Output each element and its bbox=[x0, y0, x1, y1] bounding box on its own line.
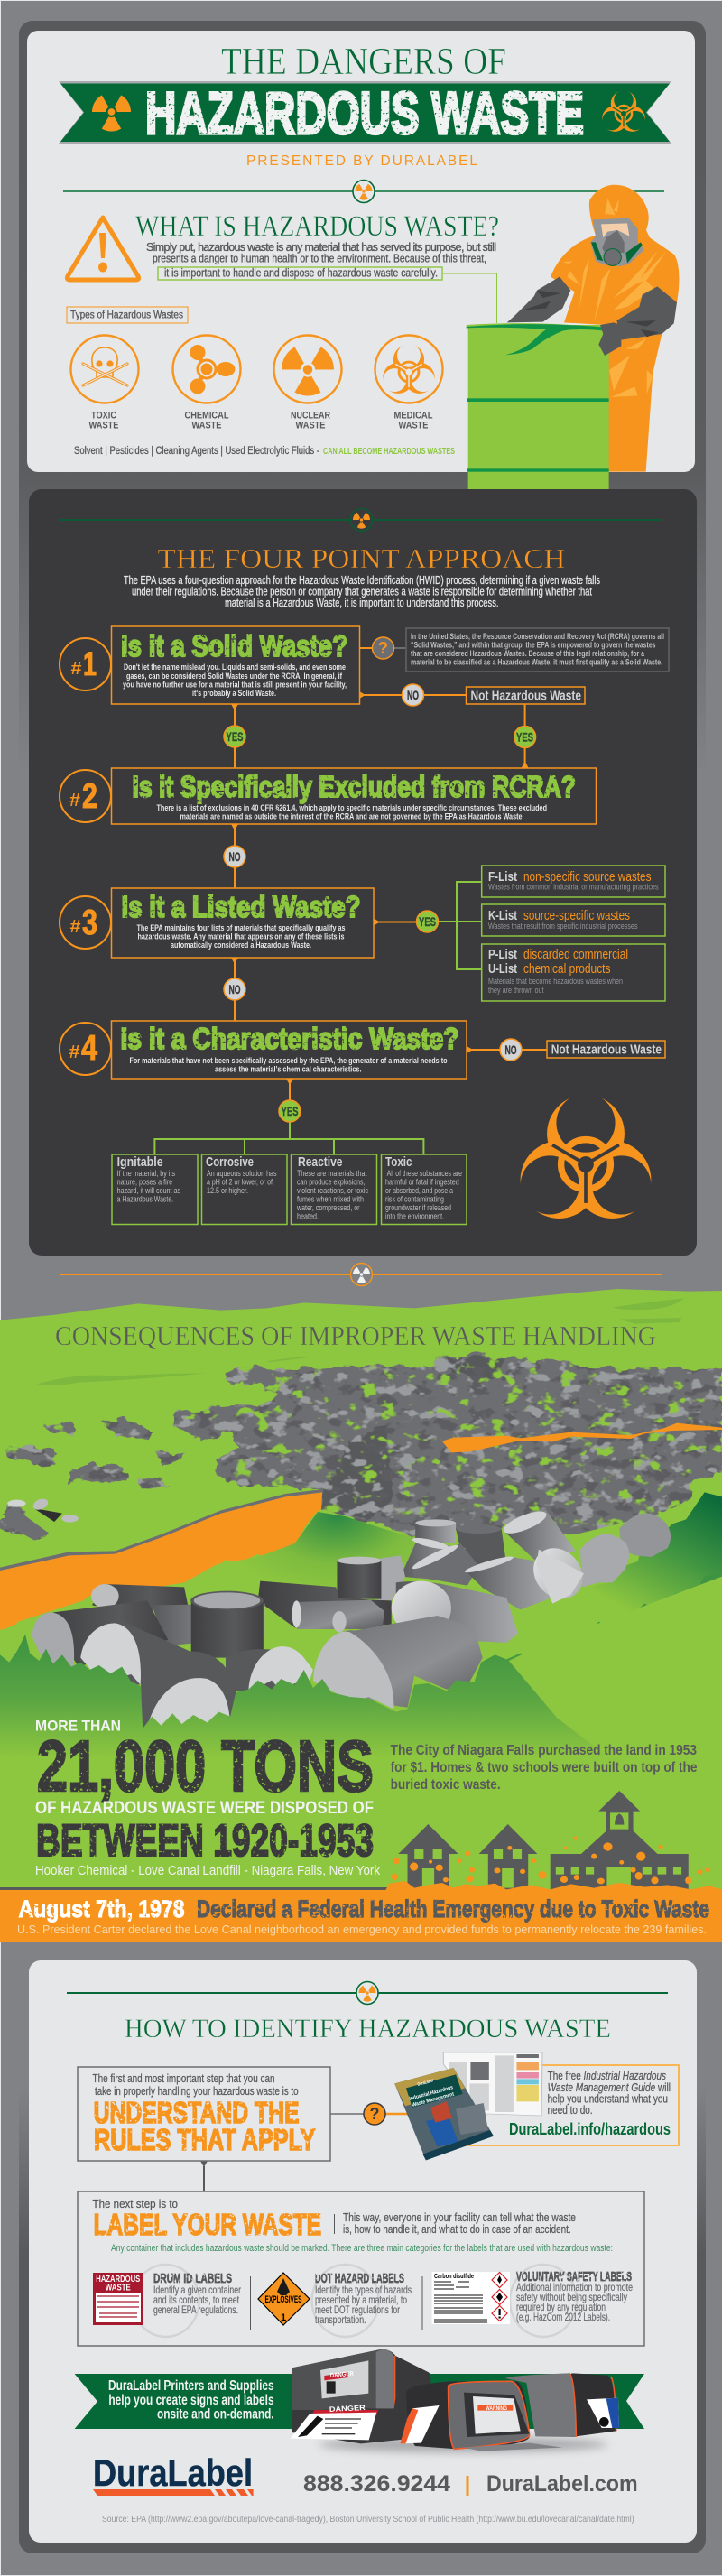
guide open pages bbox=[443, 2052, 542, 2116]
guide url: DuraLabel.info/hazardous bbox=[509, 2119, 671, 2138]
logo: DuraLabel: DuraLabel bbox=[93, 2451, 253, 2494]
voluntary safety description bbox=[516, 2269, 633, 2323]
list box: F-list: Wastes from common industrial or manufacturing practices bbox=[488, 883, 659, 892]
contact: phone and website bbox=[303, 2471, 638, 2497]
label: toxic waste: TOXIC bbox=[91, 410, 116, 421]
step 4 question: Is it a Characteristic Waste? bbox=[121, 1022, 458, 1055]
heading: consequences: CONSEQUENCES OF IMPROPER WASTE HANDLING bbox=[55, 1320, 656, 1351]
illustration: green hills, landfill town and barrels bbox=[0, 1289, 722, 1889]
stat: of hazardous waste: OF HAZARDOUS WASTE WERE DISPOSED OF bbox=[35, 1798, 374, 1818]
gray printer bbox=[505, 2373, 619, 2437]
question node: ? bbox=[370, 2105, 379, 2123]
guide callout: need to do. bbox=[548, 2103, 593, 2117]
node: no: NO bbox=[229, 849, 241, 864]
date: August 7th, 1978 bbox=[18, 1895, 184, 1923]
characteristic: ignitable bbox=[112, 1154, 198, 1224]
definition text: Simply put, hazardous waste is any material that has served its purpose, but still bbox=[146, 241, 496, 254]
step 4 box bbox=[112, 1021, 467, 1079]
label: chemical waste: WASTE bbox=[191, 421, 222, 431]
step 2 description bbox=[157, 803, 547, 821]
sample: DOT hazard diamond bbox=[258, 2273, 310, 2325]
characteristic: toxic: harmful or fatal if ingested bbox=[385, 1177, 459, 1188]
sample: drum ID label bbox=[93, 2273, 143, 2325]
green hill bbox=[0, 1289, 722, 1889]
drum id description: DRUM ID LABELS bbox=[153, 2271, 232, 2286]
step: label your waste: is, how to handle it, and what to do in case of an accident. bbox=[343, 2222, 571, 2236]
characteristic: reactive: These are materials that bbox=[297, 1169, 367, 1179]
printer screen labels bbox=[329, 2371, 507, 2414]
stat: more than: MORE THAN bbox=[35, 1719, 121, 1735]
label: medical waste: MEDICAL bbox=[393, 410, 433, 421]
list box: P-list and U-list: they are thrown out bbox=[488, 986, 544, 995]
small printer bbox=[400, 2381, 562, 2451]
section divider bbox=[67, 1982, 668, 2004]
panel: four point approach bbox=[29, 489, 697, 1256]
characteristic: ignitable: Ignitable bbox=[117, 1154, 163, 1170]
step 1 description: Don't let the name mislead you. Liquids and semi-solids, and even some bbox=[124, 663, 346, 672]
examples line: CAN ALL BECOME HAZARDOUS WASTES bbox=[323, 446, 455, 457]
node: yes: YES bbox=[419, 914, 436, 929]
ribbon: printers and supplies: help you create signs and labels bbox=[108, 2393, 274, 2408]
gray ground line bbox=[0, 1887, 388, 1890]
dot hazard description: meet DOT regulations for bbox=[315, 2303, 400, 2316]
respirator mask bbox=[590, 218, 644, 266]
definition text bbox=[146, 241, 496, 265]
characteristic: reactive: can produce explosions, bbox=[297, 1177, 365, 1188]
title line: the dangers of: THE DANGERS OF bbox=[221, 42, 506, 83]
arrowheads bbox=[231, 691, 529, 1085]
characteristic: reactive: water, compressed, or bbox=[296, 1203, 359, 1213]
callout: handle carefully bbox=[158, 267, 496, 323]
icon: nuclear waste bbox=[274, 336, 341, 403]
category dividers bbox=[251, 2276, 422, 2330]
question mark node bbox=[372, 637, 393, 659]
characteristic: corrosive: Corrosive bbox=[206, 1154, 254, 1170]
callout: handle carefully: it is important to handle and dispose of hazardous waste carefully. bbox=[164, 267, 438, 280]
niagara falls text: buried toxic waste. bbox=[391, 1777, 501, 1793]
barrels: center rows bbox=[258, 1555, 518, 1643]
icon: chemical waste bbox=[173, 336, 240, 403]
list box: K-list bbox=[482, 904, 665, 936]
characteristic: corrosive: 12.5 or higher. bbox=[207, 1186, 248, 1196]
dot hazard description: Identify the types of hazards bbox=[315, 2284, 412, 2296]
characteristic: toxic: Toxic bbox=[385, 1154, 412, 1170]
faint number watermarks bbox=[133, 2265, 577, 2337]
characteristic: toxic: or absorbed, and pose a bbox=[385, 1186, 454, 1196]
result: not hazardous waste: Not Hazardous Waste bbox=[551, 1042, 662, 1058]
background slope and grass layers bbox=[0, 1492, 722, 1715]
list box: F-list bbox=[482, 866, 665, 897]
list box: K-list: source-specific wastes bbox=[523, 908, 630, 923]
step 4 badge: 4 bbox=[81, 1029, 97, 1068]
step 3 badge: 3 bbox=[82, 903, 97, 942]
headline: understand the rules that apply: RULES THAT APPLY bbox=[94, 2123, 316, 2156]
step 3 badge: # bbox=[70, 917, 81, 937]
label: nuclear waste: NUCLEAR bbox=[291, 410, 330, 421]
step 1 description: it's probably a Solid Waste. bbox=[192, 689, 276, 699]
dot hazard description: DOT HAZARD LABELS bbox=[315, 2271, 404, 2286]
contact: phone and website: DuraLabel.com bbox=[486, 2471, 638, 2497]
niagara falls text bbox=[391, 1743, 698, 1793]
examples line: Solvent | Pesticides | Cleaning Agents | Used Electrolytic Fluids - bbox=[74, 446, 319, 457]
dot hazard description: transportation. bbox=[315, 2313, 366, 2326]
sample: GHS label bbox=[432, 2272, 510, 2324]
list box: P-list and U-list: Materials that become hazardous wastes when bbox=[488, 977, 623, 986]
question node bbox=[364, 2103, 385, 2125]
icon: radiation bbox=[92, 95, 131, 131]
step 4 description: assess the material’s chemical characteristics. bbox=[215, 1065, 361, 1074]
characteristic: reactive: fumes when mixed with bbox=[297, 1195, 364, 1204]
label: toxic waste bbox=[88, 410, 119, 431]
illustration: houses and school in toxic sludge bbox=[392, 1791, 710, 1891]
step 1 question: Is it a Solid Waste? bbox=[121, 629, 347, 663]
characteristic: toxic bbox=[381, 1154, 467, 1224]
step 4 badge bbox=[60, 1023, 111, 1075]
step 1 badge: 1 bbox=[83, 645, 97, 682]
dot hazard description: presented by a material, to bbox=[315, 2293, 407, 2306]
characteristic: ignitable: hazard, it will count as bbox=[117, 1186, 180, 1196]
voluntary safety description: Additional information to promote bbox=[516, 2281, 633, 2293]
characteristic: corrosive bbox=[202, 1154, 287, 1224]
label: chemical waste bbox=[184, 410, 229, 431]
node: yes: YES bbox=[516, 729, 533, 744]
icon: warning triangle bbox=[67, 218, 139, 280]
house 2 bbox=[479, 1824, 537, 1891]
icon: large biohazard bbox=[521, 1095, 651, 1219]
step: label your waste bbox=[78, 2191, 644, 2346]
sample: drum ID label: WASTE bbox=[106, 2284, 131, 2293]
jagged foreground grass bbox=[0, 1572, 722, 1757]
result: not hazardous waste: Not Hazardous Waste bbox=[471, 688, 581, 704]
heading: the four point approach: THE FOUR POINT APPROACH bbox=[157, 542, 565, 574]
headline: label your waste: LABEL YOUR WASTE bbox=[94, 2208, 321, 2241]
printer screen labels: DANGER bbox=[329, 2404, 366, 2414]
ribbon: printers and supplies: DuraLabel Printers and Supplies bbox=[108, 2378, 274, 2394]
characteristic: corrosive: a pH of 2 or lower, or of bbox=[207, 1177, 273, 1188]
printer screen labels: WARNING bbox=[486, 2405, 507, 2412]
characteristic: toxic: groundwater if released bbox=[385, 1203, 451, 1213]
list box: P-list and U-list: chemical products bbox=[523, 961, 610, 977]
orange sludge goo bbox=[384, 1881, 722, 1895]
drum id description bbox=[153, 2271, 241, 2316]
question mark node: ? bbox=[378, 639, 388, 657]
step: label your waste: The next step is to bbox=[92, 2197, 178, 2210]
label: medical waste: WASTE bbox=[399, 421, 428, 431]
characteristic: ignitable: If the material, by its bbox=[117, 1169, 175, 1179]
house 1 bbox=[398, 1824, 458, 1891]
sample: GHS label: Carbon disulfide bbox=[434, 2272, 474, 2280]
step 2 box bbox=[112, 768, 596, 824]
green drum bbox=[467, 323, 609, 635]
location caption: Hooker Chemical - Love Canal Landfill - Niagara Falls, New York bbox=[35, 1863, 380, 1878]
list box: P-list and U-list: P-List bbox=[488, 948, 517, 962]
step 3 description: The EPA maintains four lists of materials that specifically qualify as bbox=[137, 923, 345, 933]
step 2 badge: # bbox=[69, 791, 80, 811]
connectors: green flow lines bbox=[154, 882, 481, 1154]
stat: 21,000 tons: 21,000 TONS bbox=[37, 1726, 374, 1806]
characteristic: corrosive: An aqueous solution has bbox=[207, 1169, 277, 1179]
step 1 badge bbox=[60, 638, 111, 690]
node: yes bbox=[279, 1100, 301, 1122]
step 2 description: There is a list of exclusions in 40 CFR §261.4, which apply to specific materials under specific circumstances. These excluded bbox=[157, 803, 547, 813]
step 2 badge: 2 bbox=[82, 777, 97, 816]
guide callout: The free Industrial Hazardous bbox=[548, 2069, 666, 2082]
list box: K-list: Wastes that result from specific industrial processes bbox=[488, 922, 638, 931]
drum id description: general EPA regulations. bbox=[153, 2303, 238, 2316]
guide cover title: DuraLabel bbox=[417, 2078, 434, 2088]
stat: between 1920-1953: BETWEEN 1920-1953 bbox=[36, 1815, 374, 1866]
node: yes: YES bbox=[282, 1104, 298, 1118]
intro paragraph: material is a Hazardous Waste, it is important to understand this process. bbox=[225, 597, 498, 609]
list box: K-list: K-List bbox=[488, 909, 517, 923]
worker suit bbox=[551, 185, 679, 472]
guide cover title bbox=[409, 2078, 455, 2108]
illustration: hazardous waste guide bbox=[394, 2052, 542, 2160]
icon: toxic waste bbox=[70, 336, 139, 403]
illustration: label printers bbox=[291, 2349, 619, 2452]
presented by: PRESENTED BY DURALABEL bbox=[246, 153, 477, 169]
guide cover title: Industrial Hazardous bbox=[409, 2085, 454, 2102]
dot hazard description bbox=[315, 2271, 412, 2326]
right arm bbox=[616, 286, 677, 340]
step 4 description bbox=[130, 1056, 448, 1074]
icon: medical waste bbox=[375, 336, 442, 403]
sample: drum ID label: HAZARDOUS bbox=[96, 2275, 141, 2284]
step 1 description: gases, can be considered Solid Wastes under the RCRA. In general, if bbox=[126, 672, 343, 681]
guide cover title: Waste Management bbox=[412, 2092, 455, 2108]
printer shadow bbox=[319, 2437, 607, 2452]
characteristic: reactive: violent reactions, or toxic bbox=[297, 1186, 368, 1196]
label: nuclear waste bbox=[291, 410, 330, 431]
step: understand the rules bbox=[78, 2067, 330, 2161]
list box: F-list: non-specific source wastes bbox=[523, 869, 652, 885]
large printer bbox=[291, 2349, 430, 2443]
node: no bbox=[500, 1039, 522, 1061]
ribbon: printers and supplies: onsite and on-demand. bbox=[157, 2406, 274, 2423]
node: no: NO bbox=[229, 982, 241, 996]
voluntary safety description: safety without being specifically bbox=[516, 2291, 627, 2303]
node: yes bbox=[224, 726, 245, 747]
list box: F-list: F-List bbox=[488, 870, 517, 885]
characteristic: toxic: All of these substances are bbox=[387, 1169, 462, 1179]
step 1 description bbox=[123, 663, 347, 699]
label: medical waste bbox=[393, 410, 433, 431]
town silhouette bbox=[0, 1355, 722, 1541]
section divider bbox=[60, 509, 662, 531]
contact: phone and website: 888.326.9244 bbox=[303, 2471, 450, 2497]
step 3 description: hazardous waste. Any material that appears on any of these lists is bbox=[137, 931, 345, 942]
headline: understand the rules that apply: UNDERSTAND THE bbox=[94, 2096, 300, 2129]
voluntary safety description: required by any regulation bbox=[516, 2301, 606, 2313]
panel: consequences landscape bbox=[0, 1289, 722, 1942]
illustration: worker in hazmat suit bbox=[467, 185, 679, 635]
label: types of hazardous wastes: Types of Hazardous Wastes bbox=[70, 310, 183, 321]
drum id description: Identify a given container bbox=[153, 2284, 241, 2296]
step 4 badge: # bbox=[69, 1042, 79, 1062]
characteristic: reactive: Reactive bbox=[298, 1154, 343, 1170]
panel background bbox=[29, 1960, 697, 2543]
toxic bubbles bbox=[392, 1837, 710, 1884]
node: yes bbox=[417, 911, 439, 932]
icon: biohazard bbox=[602, 91, 645, 132]
characteristic: ignitable: nature, poses a fire bbox=[117, 1177, 172, 1188]
arm folds bbox=[523, 291, 659, 337]
barrels: front row bbox=[141, 1616, 483, 1730]
step 2 badge bbox=[60, 770, 111, 822]
panel: intro bbox=[27, 31, 695, 472]
step 4 description: For materials that have not been specifically assessed by the EPA, the generator of a material needs to bbox=[130, 1056, 448, 1066]
label: nuclear waste: WASTE bbox=[296, 421, 325, 431]
characteristic: reactive: heated. bbox=[297, 1211, 319, 1222]
characteristic: toxic: risk of contaminating bbox=[385, 1195, 444, 1204]
list box: P-list and U-list: discarded commercial bbox=[523, 947, 628, 962]
guide callout: help you understand what you bbox=[548, 2092, 668, 2105]
voluntary safety description: VOLUNTARY SAFETY LABELS bbox=[516, 2269, 632, 2284]
step: understand the rules: The first and most important step that you can bbox=[92, 2071, 274, 2085]
suit creases bbox=[562, 199, 666, 397]
definition text: presents a danger to human health or to the environment. Because of this threat, bbox=[153, 253, 486, 265]
node: yes bbox=[514, 726, 536, 747]
voluntary safety description: (e.g. HazCom 2012 Labels). bbox=[516, 2311, 610, 2323]
glove bbox=[598, 322, 621, 356]
panel background bbox=[29, 489, 697, 1256]
step 3 box bbox=[112, 888, 374, 958]
ribbon: printers and supplies bbox=[75, 2374, 644, 2429]
intro panel background bbox=[27, 31, 695, 472]
node: yes: YES bbox=[226, 729, 244, 744]
printer screen labels: DANGER bbox=[330, 2371, 354, 2379]
barrels: far left group bbox=[3, 1497, 79, 1541]
list box: P-list and U-list: U-List bbox=[488, 962, 517, 977]
label: types of hazardous wastes bbox=[67, 307, 188, 323]
guide callout: Waste Management Guide will bbox=[548, 2080, 671, 2094]
RCRA note bbox=[406, 628, 669, 672]
sample: DOT hazard diamond: EXPLOSIVES bbox=[265, 2294, 301, 2305]
characteristic: toxic: into the environment. bbox=[385, 1211, 444, 1222]
guide cover bbox=[394, 2068, 494, 2160]
step 3 question: Is it a Listed Waste? bbox=[121, 890, 361, 923]
step 1 badge: # bbox=[70, 659, 81, 679]
toxic waste barrels bbox=[3, 1497, 671, 1730]
step 1 box bbox=[112, 626, 359, 704]
characteristic: reactive bbox=[291, 1154, 377, 1224]
label: toxic waste: WASTE bbox=[88, 421, 119, 431]
step 3 description bbox=[137, 923, 345, 950]
section divider bbox=[63, 181, 664, 202]
barrels: left rows bbox=[32, 1584, 264, 1685]
drum id description: and its contents, to meet bbox=[153, 2293, 239, 2306]
headline: understand the rules that apply bbox=[94, 2096, 315, 2156]
step: label your waste: This way, everyone in your facility can tell what the waste bbox=[343, 2210, 576, 2224]
list box: P-list and U-list bbox=[482, 944, 665, 1001]
title ribbon bbox=[59, 79, 671, 146]
orange toxic river bbox=[0, 1423, 722, 1632]
node: no: NO bbox=[505, 1042, 517, 1057]
node: no bbox=[224, 846, 245, 867]
step 3 description: automatically considered a Hazardous Waste. bbox=[171, 941, 311, 950]
heading: how to identify: HOW TO IDENTIFY HAZARDOUS WASTE bbox=[125, 2014, 611, 2043]
sample: DOT hazard diamond: 1 bbox=[281, 2312, 286, 2323]
step 2 question: Is it Specifically Excluded from RCRA? bbox=[132, 770, 576, 803]
step: understand the rules: take in properly handling your hazardous waste is to bbox=[95, 2084, 299, 2098]
node: no: NO bbox=[407, 688, 419, 702]
step 2 description: materials are named as outside the interest of the RCRA and are not governed by the EPA as Hazardous Waste. bbox=[180, 812, 523, 821]
section divider: orange bbox=[60, 1264, 662, 1285]
band: emergency declaration bbox=[0, 1890, 722, 1942]
panel: how to identify bbox=[29, 1960, 697, 2543]
intro paragraph bbox=[124, 574, 600, 609]
left arm bbox=[507, 277, 570, 322]
step 1 description: you have no further use for a material that is still present in your facility, bbox=[123, 681, 347, 690]
guide callout bbox=[465, 2065, 679, 2145]
school bbox=[551, 1791, 689, 1891]
step 3 badge bbox=[60, 896, 111, 949]
connector and arrow bbox=[200, 2114, 408, 2191]
label: chemical waste: CHEMICAL bbox=[184, 410, 229, 421]
node: no bbox=[224, 978, 245, 1000]
barrels: back right rows bbox=[401, 1507, 671, 1609]
connector: gray bbox=[394, 647, 406, 649]
connectors: orange flow lines bbox=[235, 648, 547, 1100]
characteristic: ignitable: a Hazardous Waste. bbox=[117, 1195, 173, 1204]
node: no bbox=[403, 684, 424, 706]
heading: what is hazardous waste: WHAT IS HAZARDOUS WASTE? bbox=[135, 210, 499, 243]
relocation note: U.S. President Carter declared the Love Canal neighborhood an emergency and provided funds to permanently relocate the 239 families. bbox=[17, 1923, 707, 1936]
